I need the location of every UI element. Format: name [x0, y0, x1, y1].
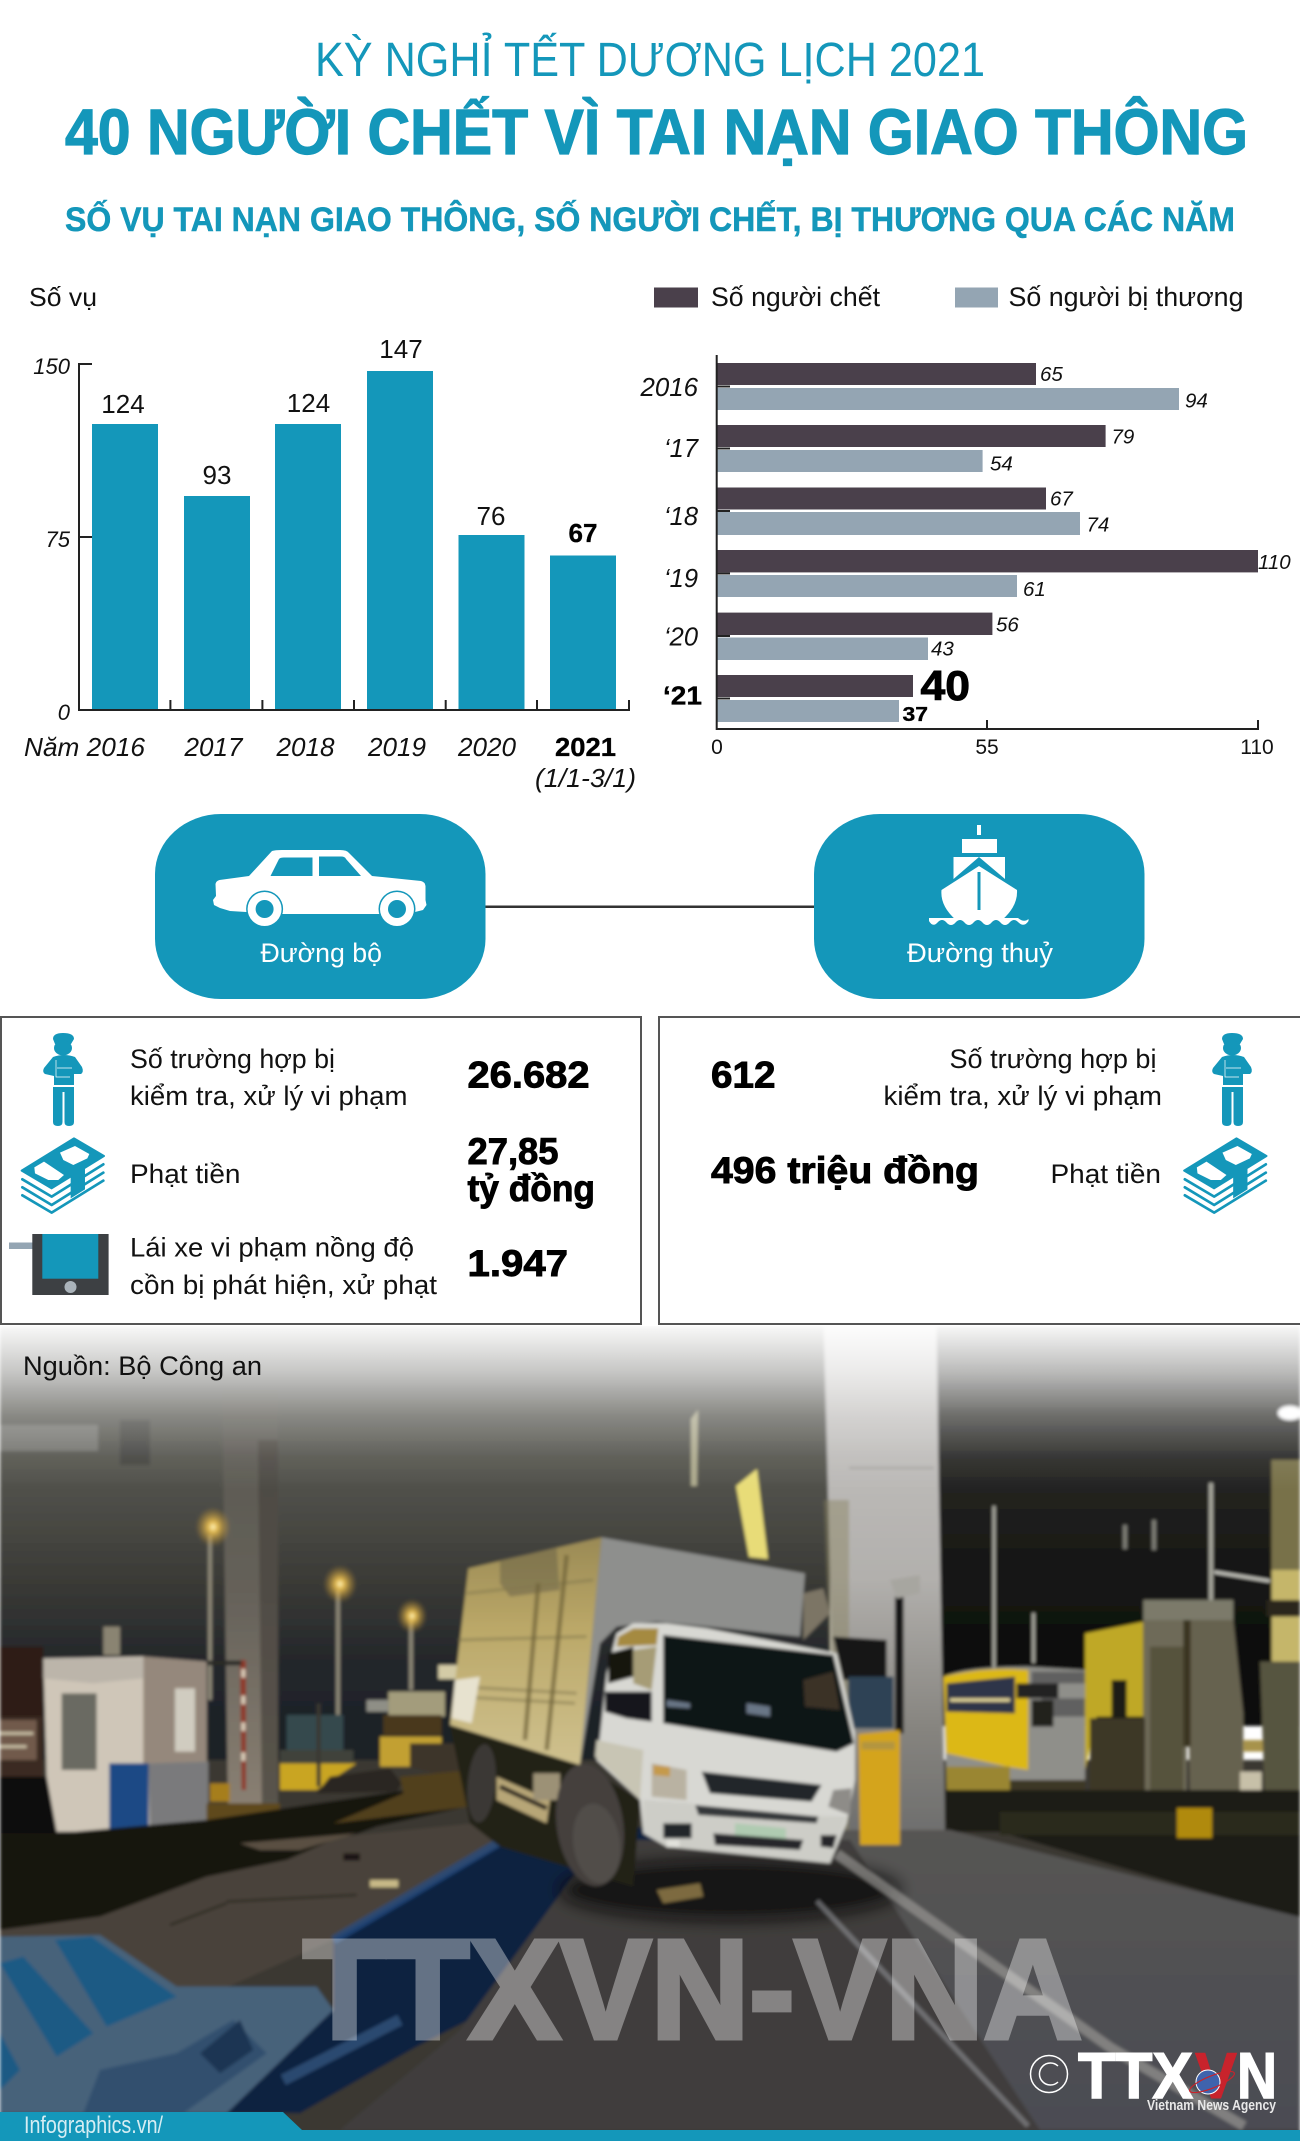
yellow lit ground	[280, 1763, 357, 1790]
left booth and scene	[0, 1627, 680, 2113]
bar values: 67	[569, 518, 597, 548]
chassis shadow	[450, 1725, 640, 1887]
cargo box, front face	[580, 1537, 805, 1765]
site label: Infographics.vn/	[24, 2112, 163, 2139]
panel: road statistics	[1, 1017, 641, 1324]
logo TTXVN: TTX	[1078, 2039, 1193, 2112]
headlights	[652, 1763, 687, 1800]
bar values	[931, 363, 1291, 660]
x axis labels: 0	[711, 736, 723, 759]
row labels: Số trường hợp bị	[130, 1044, 335, 1074]
row labels: kiểm tra, xử lý vi phạm	[130, 1081, 408, 1111]
icon: stack of money	[1184, 1138, 1266, 1213]
footer band with site label	[0, 2112, 1300, 2141]
row labels	[130, 1044, 438, 1300]
logo TTXVN: N	[1237, 2039, 1277, 2112]
bar values	[101, 334, 597, 548]
legend: Số người chết	[711, 282, 880, 312]
y axis labels: 0	[58, 700, 71, 725]
bar values: 94	[1185, 390, 1208, 412]
x axis labels: 110	[1240, 736, 1274, 759]
bar values: 56	[996, 614, 1019, 636]
logo TTXVN: Vietnam News Agency	[1147, 2098, 1276, 2114]
label: Đường thuỷ	[907, 938, 1053, 968]
central gantry, pillar, yellow strip	[691, 1326, 945, 1830]
side window and mirror	[608, 1647, 633, 1683]
panel: waterway transport	[814, 814, 1144, 999]
bar values: 110	[1258, 551, 1291, 574]
figures: tỷ đồng	[468, 1168, 595, 1209]
cab body	[597, 1623, 855, 1863]
x axis labels: 55	[975, 736, 999, 759]
year labels: ‘21	[663, 680, 702, 710]
right toll booths and yellow bus	[943, 1460, 1300, 1807]
legend: Số người bị thương	[1008, 282, 1244, 312]
icon: stack of money	[22, 1138, 104, 1213]
y axis labels: 150	[33, 354, 71, 379]
figures	[468, 1054, 595, 1284]
row labels: cồn bị phát hiện, xử phạt	[130, 1270, 438, 1300]
source note: Nguồn: Bộ Công an	[23, 1351, 262, 1381]
x axis labels: 2019	[367, 732, 426, 762]
bar values: 74	[1086, 514, 1109, 536]
row labels: kiểm tra, xử lý vi phạm	[884, 1081, 1162, 1111]
blue striped block	[0, 1935, 333, 2113]
legend	[654, 282, 1244, 312]
road	[340, 1840, 1244, 2130]
icon: ship	[929, 825, 1028, 925]
top fade to white	[0, 1326, 1300, 1491]
bar values: 76	[477, 501, 505, 531]
figures: 496 triệu đồng	[711, 1150, 979, 1191]
bar values: 67	[1050, 488, 1074, 510]
year labels: 2016	[640, 372, 699, 402]
row labels: Phạt tiền	[1050, 1159, 1161, 1189]
dark blue curb	[227, 1827, 680, 2113]
x axis labels: 2021	[555, 732, 616, 762]
yellow barrier	[858, 1730, 900, 1845]
bar values: 65	[1040, 363, 1063, 386]
cargo box, side lit	[450, 1537, 602, 1765]
dark bars: deaths	[717, 363, 1258, 697]
dark verge	[0, 1780, 467, 1930]
bar values: 147	[379, 334, 423, 364]
wheels	[464, 1743, 499, 1824]
row labels: Lái xe vi phạm nồng độ	[130, 1232, 414, 1262]
bar values: 43	[931, 638, 954, 660]
y axis labels: 75	[46, 527, 71, 552]
axis title: Số vụ	[29, 282, 97, 312]
bar values: 79	[1112, 426, 1134, 448]
x axis labels: Năm 2016	[24, 732, 146, 762]
bar chart: number of accidents	[24, 282, 636, 793]
row labels	[884, 1044, 1162, 1189]
bumper details	[663, 1823, 692, 1838]
photo scenery	[0, 1326, 1300, 2141]
panel: waterway statistics	[659, 1017, 1300, 1324]
row labels: Phạt tiền	[130, 1159, 240, 1189]
median surface	[0, 1820, 520, 2007]
horizontal bar chart: deaths and injuries: 37	[902, 704, 928, 726]
watermark TTXVN-VNA: TTXVN-VNA	[303, 1910, 1082, 2068]
row labels: Số trường hợp bị	[950, 1044, 1156, 1074]
light bars: injuries	[717, 388, 1179, 722]
highlighted 2021 values: 40	[920, 662, 970, 709]
mirror arm near pillar	[803, 1588, 830, 1640]
icon: police officer	[1212, 1033, 1252, 1126]
icon: breathalyzer device	[9, 1234, 109, 1295]
logo TTXVN: V	[1195, 2039, 1237, 2112]
windshield	[663, 1635, 854, 1752]
year labels: ‘19	[664, 563, 698, 593]
distant truck	[388, 1692, 445, 1717]
title line 1: KỲ NGHỈ TẾT DƯƠNG LỊCH 2021	[315, 32, 985, 87]
left gantry and lamps	[0, 1390, 427, 1808]
horizontal bar chart: deaths and injuries	[640, 282, 1291, 759]
figures: 26.682	[468, 1054, 590, 1096]
debris	[657, 1883, 703, 1903]
title block	[65, 32, 1248, 239]
year labels: ‘20	[664, 622, 699, 652]
icon: police officer	[43, 1033, 83, 1126]
x axis labels: 2017	[183, 732, 244, 762]
x axis labels	[24, 732, 636, 793]
photo background sky	[0, 1326, 1300, 2141]
label: Đường bộ	[260, 938, 382, 968]
bar values: 124	[101, 389, 145, 419]
panel: road transport	[155, 814, 486, 999]
subtitle: SỐ VỤ TAI NẠN GIAO THÔNG, SỐ NGƯỜI CHẾT, BỊ THƯƠNG QUA CÁC NĂM	[65, 199, 1235, 239]
crashed truck	[450, 1537, 920, 1903]
x axis labels	[711, 736, 1274, 759]
dark box and pole	[833, 1637, 887, 1680]
y axis labels	[33, 354, 71, 725]
x axis labels: (1/1-3/1)	[535, 763, 636, 793]
year labels: ‘17	[664, 433, 700, 463]
bar values: 54	[990, 452, 1013, 476]
bar values: 124	[287, 388, 330, 418]
grille	[702, 1772, 822, 1802]
figures: 612	[711, 1054, 776, 1096]
photo: truck crashed at a toll station	[0, 1326, 1300, 2141]
bars	[92, 371, 616, 710]
x axis labels: 2018	[275, 732, 335, 762]
bar values: 61	[1023, 578, 1046, 601]
connector line	[485, 906, 815, 908]
icon: car	[213, 850, 426, 928]
year labels: ‘18	[664, 501, 699, 531]
figures: 1.947	[468, 1243, 568, 1284]
right dark band and sidewalk	[835, 1790, 1300, 2130]
x axis labels: 2020	[457, 732, 517, 762]
figures	[711, 1054, 979, 1191]
right poles and lamp	[992, 1406, 1300, 1676]
figures: 27,85	[468, 1131, 558, 1172]
bar values: 93	[203, 460, 231, 490]
logo TTXVN	[1030, 2039, 1277, 2114]
year labels	[640, 372, 702, 710]
